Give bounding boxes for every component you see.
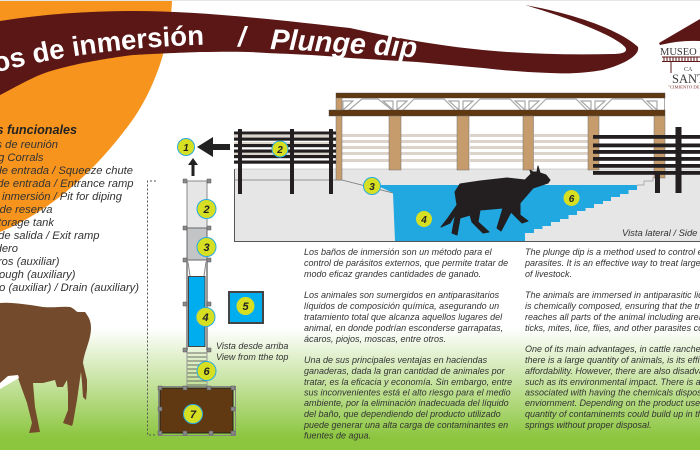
badge 6 side view (564, 190, 580, 206)
Spanish description: tratamiento total que alcanza aquellos lugares del (304, 312, 503, 322)
Spanish description: Los animales son sumergidos en antiparasitarios (304, 290, 500, 300)
Spanish description: Los baños de inmersión son un método para el (304, 247, 493, 257)
badge 4 top view (196, 308, 215, 326)
badge 5: 5 (242, 301, 249, 313)
Spanish description: del baño, que dependiendo del producto utilizado (304, 409, 501, 419)
badge 1 (178, 138, 194, 156)
title: slash: / (236, 21, 249, 52)
Spanish description: sus inconvenientes está el alto riesgo para el medio (304, 388, 511, 398)
logo rail (662, 57, 700, 73)
logo: museum: CA (684, 67, 693, 73)
Spanish description: control de parásitos externos, que permite tratar de (304, 258, 508, 268)
badge 4 top view: 4 (201, 312, 209, 324)
Spanish description: líquidos de composición química, asegurando un (304, 301, 499, 311)
badge 2 top view (197, 200, 216, 218)
top view caption: View from tthe top (216, 352, 288, 362)
Spanish description: puede generar una alta carga de contaminantes en (303, 420, 508, 430)
logo: museum (659, 19, 700, 90)
exit steps section 6 (187, 353, 207, 385)
pit section 4 (187, 260, 207, 350)
top view caption: Vista desde arriba (216, 341, 288, 351)
Spanish description: ganaderas, dada la gran cantidad de animales por (304, 366, 506, 376)
dotted bracket (148, 181, 156, 435)
badge 7 (184, 404, 202, 424)
side view diagram (234, 93, 700, 242)
functional elements list (0, 123, 139, 294)
logo roof (659, 19, 700, 45)
roof beams (336, 93, 665, 98)
badge 4 side view (416, 211, 432, 227)
badge 4 side view: 4 (420, 215, 427, 226)
badge 3 top view (197, 238, 216, 256)
pool water (376, 185, 637, 241)
title: English: Plunge dip (270, 29, 416, 62)
brown cow illustration (0, 303, 91, 433)
badge 1: 1 (183, 143, 189, 154)
chute section 2 (187, 181, 207, 228)
top view diagram (148, 137, 263, 436)
orange background shape (0, 1, 172, 232)
Spanish description: fuentes de agua. (304, 430, 371, 440)
columns (336, 98, 665, 180)
joint markers (158, 179, 235, 435)
left arrow (197, 137, 230, 157)
left fence (234, 129, 336, 194)
black cow silhouette (441, 166, 550, 235)
badge 7: 7 (190, 409, 197, 421)
ground (234, 169, 700, 241)
badge 2 top view: 2 (202, 204, 210, 216)
badge 3 top view: 3 (203, 242, 210, 254)
badge 3 side view (364, 178, 380, 194)
title banner (0, 5, 638, 95)
Spanish description: ácaros, piojos, moscas, entre otros. (304, 334, 446, 344)
upper steps (637, 177, 653, 185)
wall stripes (234, 134, 588, 162)
badge 6 side view: 6 (569, 194, 575, 205)
storage tank 5 (229, 292, 263, 323)
ramp section 3 (187, 228, 207, 260)
badge 2 side view (272, 141, 288, 157)
number badges (178, 138, 580, 424)
badge 3 side view: 3 (369, 182, 375, 193)
badge 6 top view (197, 362, 216, 380)
Spanish description: Una de sus principales ventajas en haciendas (304, 355, 488, 365)
English description: of livestock. (525, 269, 572, 279)
Spanish description: tratar, es la eficacia y economía. Sin embargo, entre (304, 377, 512, 387)
Spanish description: animal, en donde podrían esconderse garrapatas, (304, 323, 503, 333)
up arrow (188, 158, 198, 176)
badge 2 side view: 2 (276, 145, 283, 156)
logo: museum: "CIMIENTO DE (668, 84, 700, 90)
badge 6 top view: 6 (203, 366, 210, 378)
English description: springs without proper disposal. (525, 420, 652, 430)
badge 5 (236, 297, 254, 315)
drain section 7 (158, 386, 236, 436)
Spanish description: modo eficaz grandes cantidades de ganado. (304, 269, 481, 279)
Spanish description: ambiente, por la eliminación inadecuada del líquido (304, 398, 509, 408)
roof truss (342, 97, 665, 110)
right fence (593, 127, 700, 193)
